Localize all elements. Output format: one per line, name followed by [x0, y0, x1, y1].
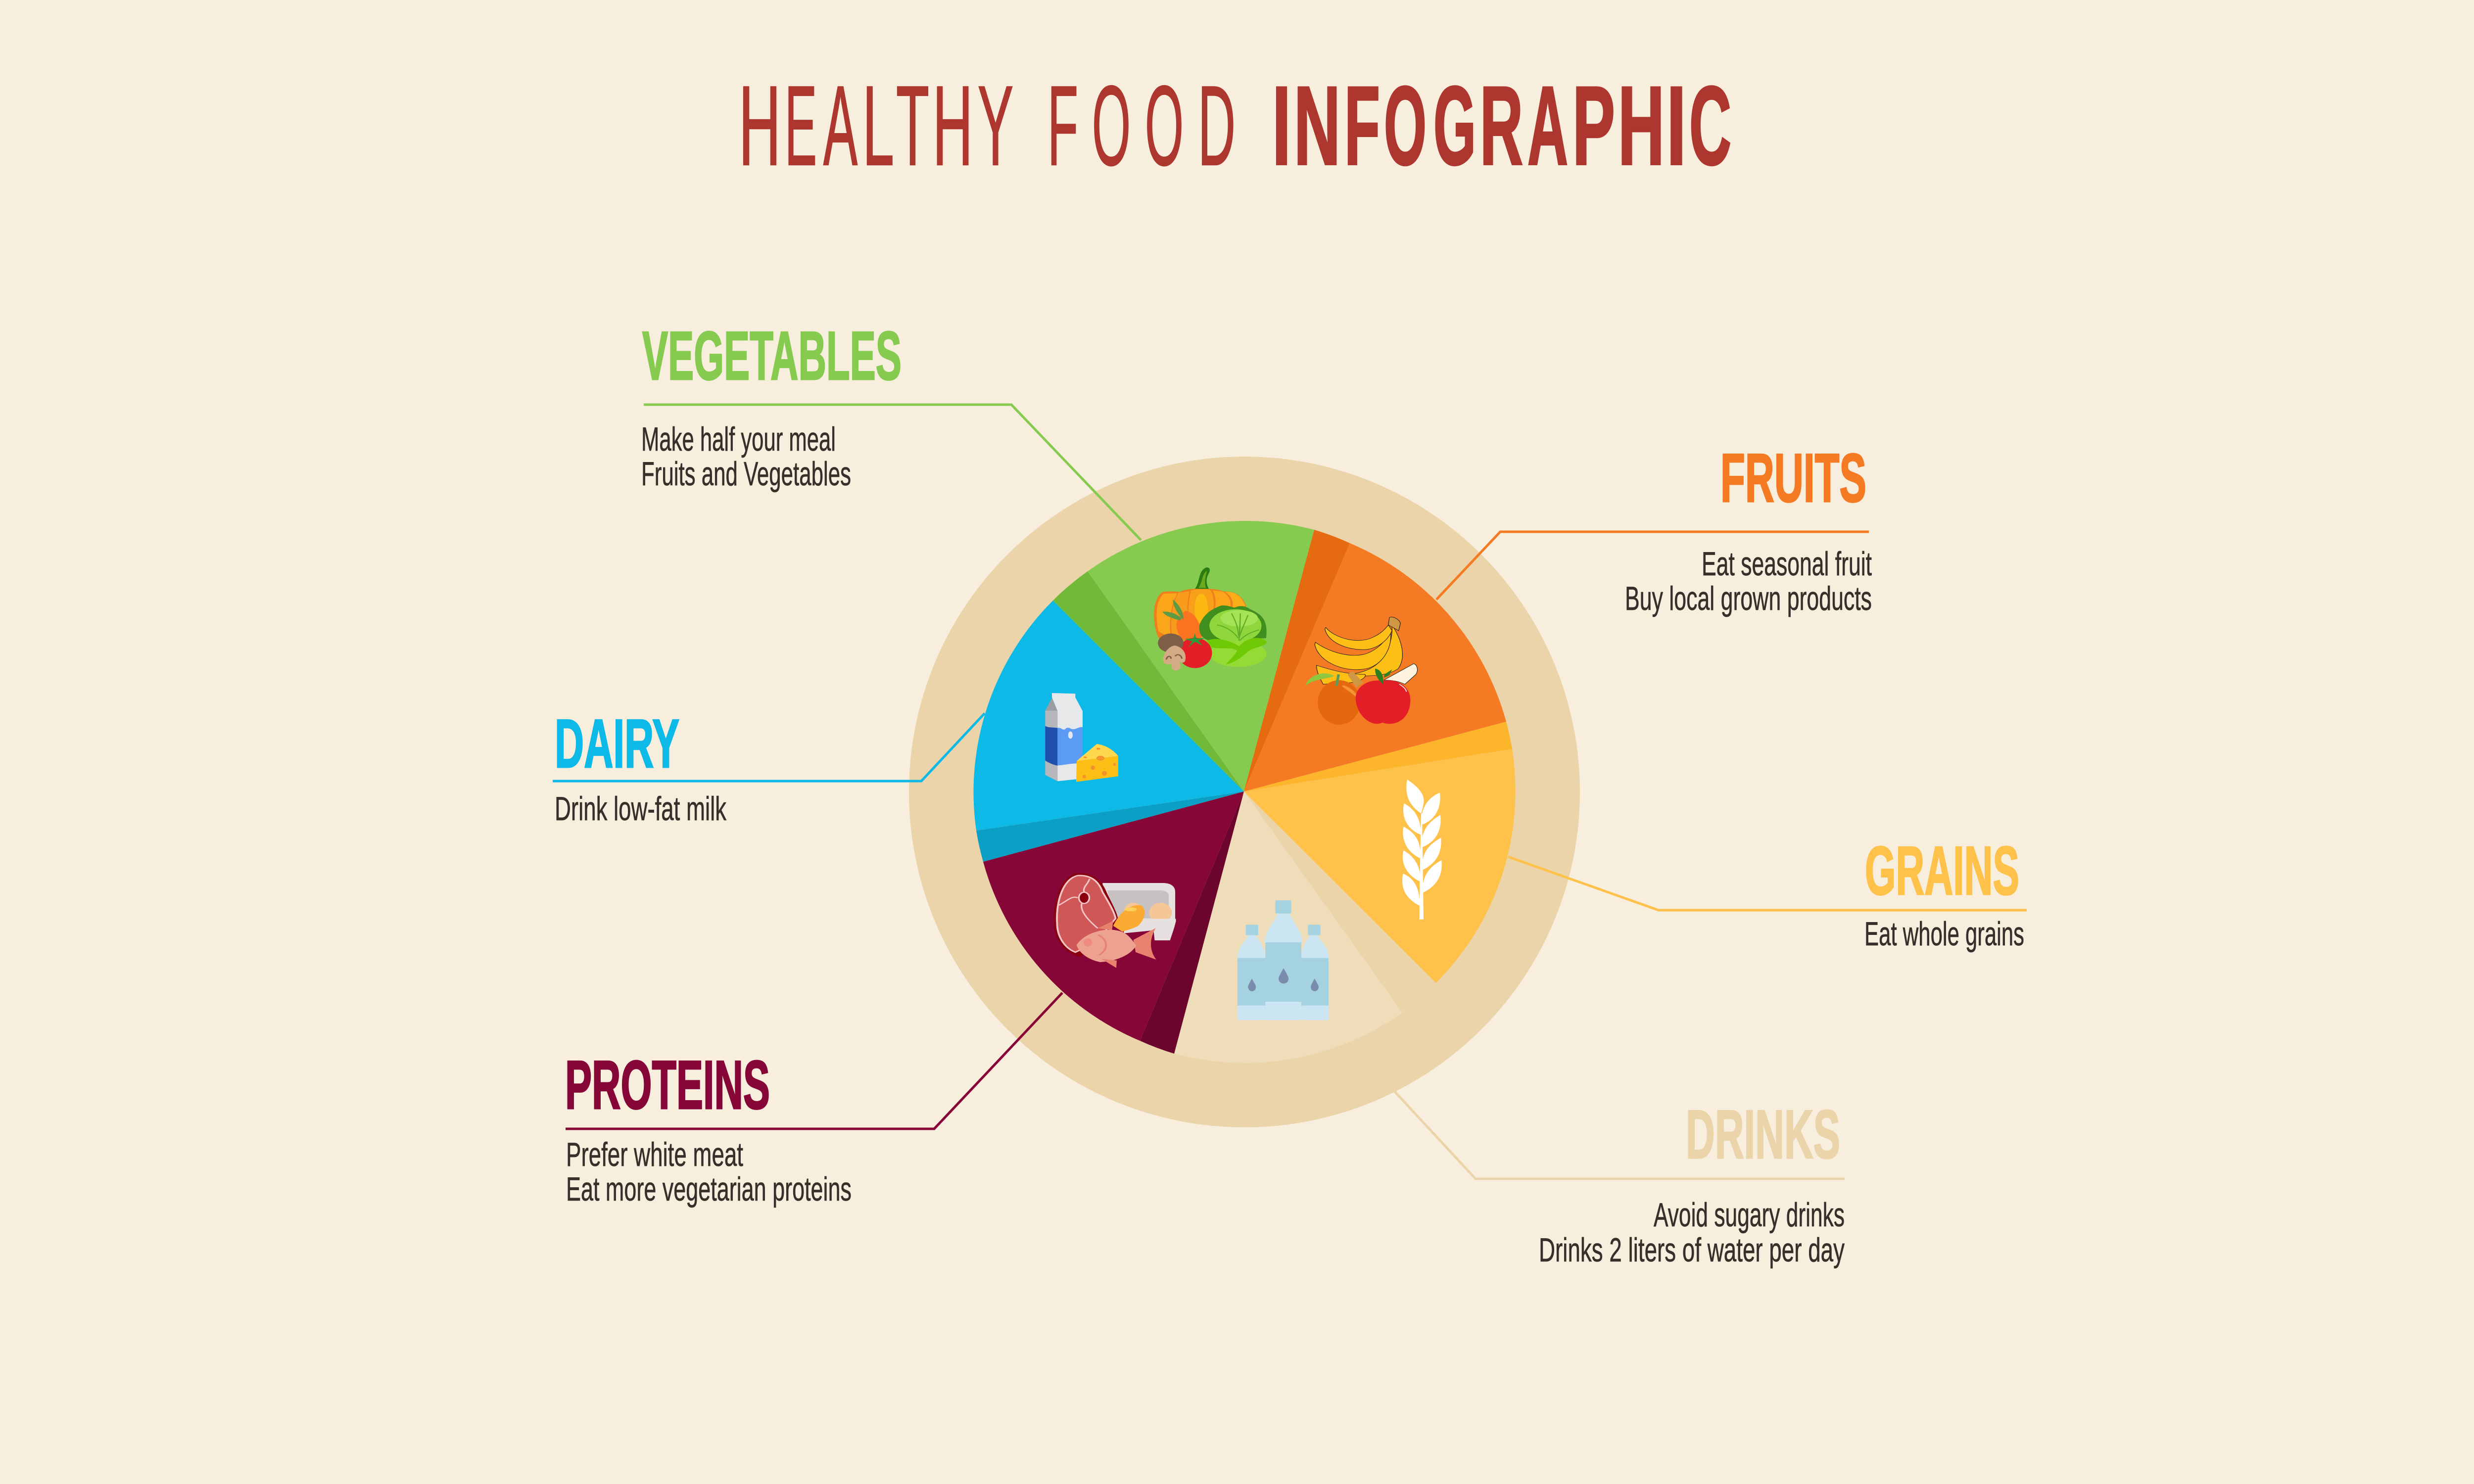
text: drinks	[1539, 1196, 1845, 1269]
title	[739, 62, 1731, 189]
slice: dairy	[973, 601, 1244, 862]
title: A	[1527, 63, 1568, 188]
connector: fruits	[1436, 532, 1869, 600]
title: T	[896, 62, 929, 189]
icon: vegetables	[1154, 567, 1267, 671]
text: proteins	[566, 1136, 852, 1208]
pie chart	[973, 521, 1516, 1063]
text: drinks: Avoid sugary drinks	[1654, 1196, 1845, 1234]
callout: drinks	[1395, 1092, 1845, 1269]
text: grains: Eat whole grains	[1864, 915, 2024, 953]
heading: dairy: DAIRY	[555, 705, 679, 782]
title: H	[933, 62, 973, 189]
callout: dairy	[553, 705, 985, 828]
title: L	[862, 62, 894, 189]
text: fruits	[1625, 545, 1872, 617]
text: vegetables: Fruits and Vegetables	[641, 455, 851, 493]
title: H	[1618, 63, 1665, 188]
text: vegetables	[641, 420, 851, 493]
title: I	[1272, 63, 1291, 188]
title: O	[1145, 62, 1184, 189]
text: drinks: Drinks 2 liters of water per day	[1539, 1231, 1845, 1269]
slice: proteins	[983, 791, 1244, 1054]
heading: fruits: FRUITS	[1720, 440, 1866, 516]
text: fruits: Eat seasonal fruit	[1702, 545, 1872, 583]
text: fruits: Buy local grown products	[1625, 580, 1872, 617]
heading: drinks: DRINKS	[1686, 1096, 1840, 1173]
title: A	[823, 62, 857, 189]
text: dairy: Drink low-fat milk	[555, 790, 727, 828]
slice: fruits	[1244, 530, 1506, 791]
slice: grains	[1244, 722, 1516, 983]
icon: milk and cheese	[1045, 693, 1118, 782]
connector: drinks	[1395, 1092, 1845, 1179]
heading: proteins: PROTEINS	[565, 1047, 770, 1123]
text: vegetables: Make half your meal	[641, 420, 836, 458]
title: F	[1047, 62, 1078, 189]
connector: vegetables	[644, 405, 1141, 540]
title: C	[1689, 63, 1731, 188]
callout: vegetables	[641, 318, 1141, 540]
icon: fruits	[1305, 617, 1418, 725]
title: F	[1344, 63, 1380, 188]
callout: proteins	[565, 993, 1062, 1208]
text: proteins: Eat more vegetarian proteins	[566, 1170, 852, 1208]
heading: vegetables: VEGETABLES	[642, 318, 902, 394]
title: N	[1294, 63, 1340, 188]
icon: water bottles	[1237, 900, 1329, 1020]
title: G	[1433, 63, 1476, 188]
title: R	[1480, 63, 1523, 188]
connector: grains	[1508, 857, 2027, 910]
icon: grain	[1402, 780, 1442, 920]
title: E	[785, 62, 817, 189]
title: Y	[978, 62, 1013, 189]
title: P	[1572, 63, 1615, 188]
title: D	[1198, 62, 1236, 189]
callout: fruits	[1436, 440, 1872, 617]
callout: grains	[1508, 833, 2027, 953]
title: O	[1384, 63, 1427, 188]
heading: grains: GRAINS	[1865, 833, 2019, 909]
icon: proteins	[1054, 873, 1176, 968]
title: H	[739, 62, 781, 189]
slice: vegetables	[1053, 521, 1314, 791]
title: O	[1092, 62, 1131, 189]
text: proteins: Prefer white meat	[566, 1136, 743, 1173]
connector: proteins	[566, 993, 1062, 1129]
connector: dairy	[553, 713, 985, 781]
title: I	[1666, 63, 1686, 188]
plate ring	[909, 457, 1580, 1127]
slice: drinks	[1174, 791, 1402, 1063]
